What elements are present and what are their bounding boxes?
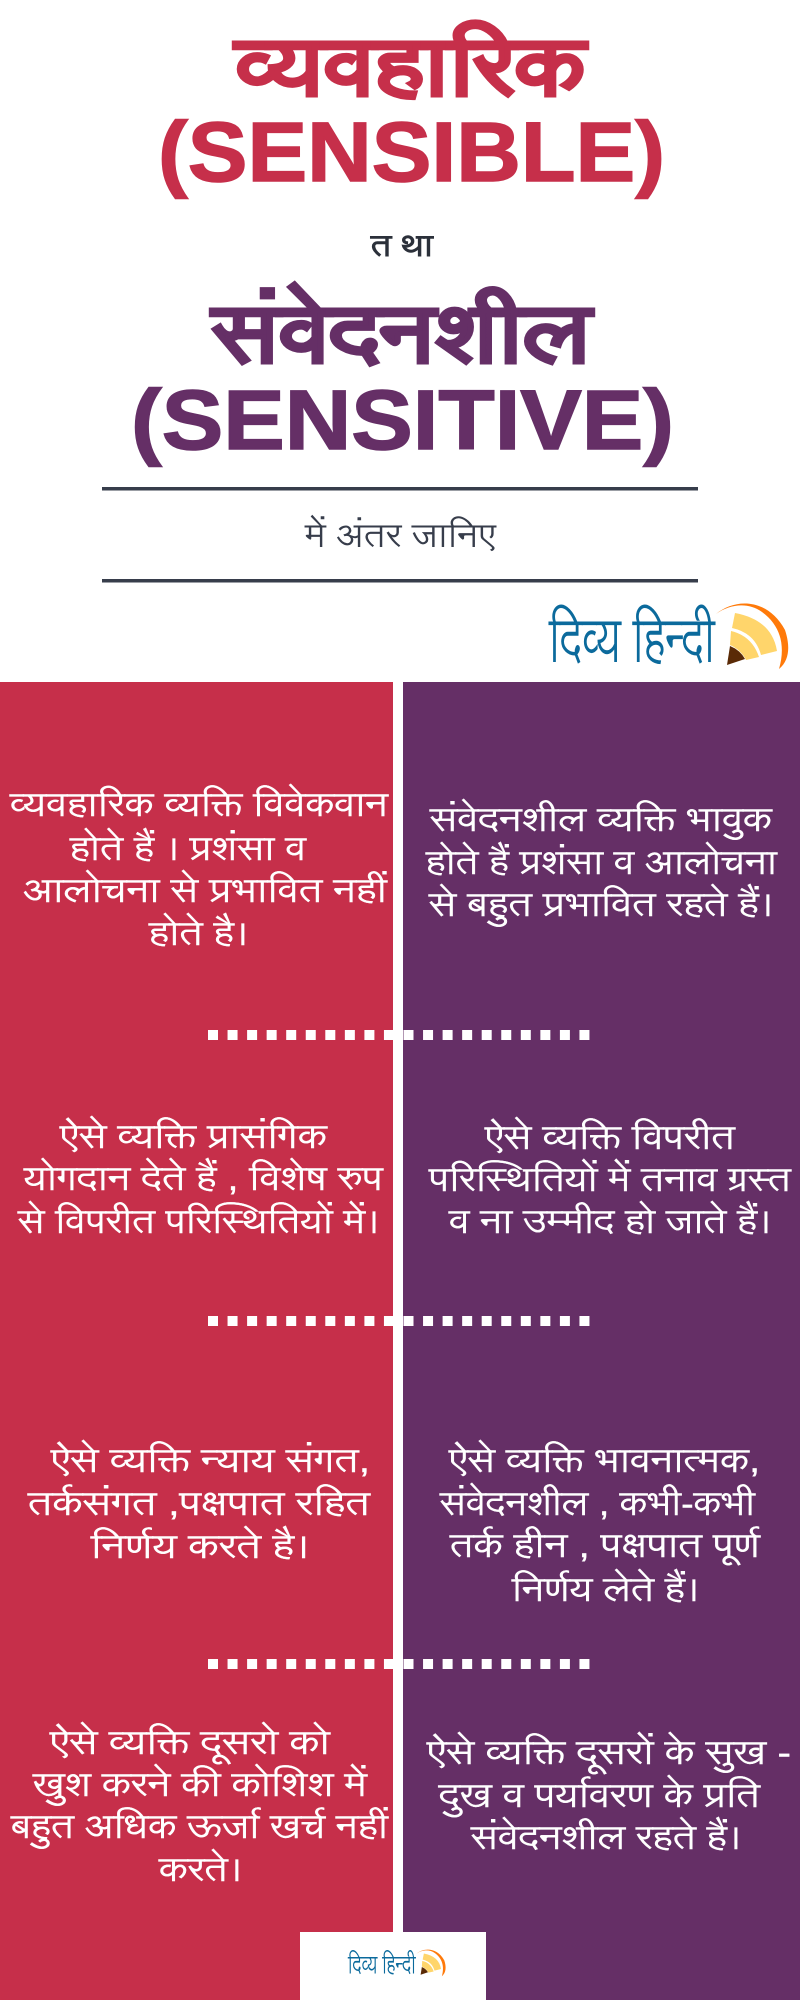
sensitive point 3 (439, 1439, 762, 1608)
sensitive point 4 (426, 1731, 791, 1856)
sensitive point 2: व ना उम्मीद हो जाते हैं। (448, 1200, 771, 1240)
dotted divider 1 (208, 1030, 590, 1040)
footer white box (300, 1932, 486, 2000)
sensible point 4: करते। (158, 1848, 242, 1888)
sensible point 4: ऐसे व्यक्ति दूसरो को (49, 1721, 332, 1765)
title: sensitive: (SENSITIVE) (131, 373, 674, 467)
sensible point 2: ऐसे व्यक्ति प्रासंगिक (59, 1115, 328, 1155)
sensible point 3: ऐसे व्यक्ति न्याय संगत, (50, 1439, 370, 1479)
sensible point 1: होते है। (148, 912, 248, 952)
dotted divider 2 (208, 1316, 590, 1326)
subtitle: में अंतर जानिए (304, 514, 497, 554)
panel: sensitive (403, 682, 800, 2000)
sensible point 4: खुश करने की कोशिश में (32, 1763, 369, 1806)
sensitive point 1: से बहुत प्रभावित रहते हैं। (428, 883, 773, 927)
title: sensible: व्यवहारिक (232, 20, 588, 112)
dotted divider 3 (208, 1659, 590, 1669)
panel: sensible (0, 682, 393, 2000)
sensible point 3 (27, 1439, 372, 1565)
logo: दिव्य हिन्दी (548, 605, 716, 676)
sensitive point 3: तर्क हीन , पक्षपात पूर्ण (449, 1525, 762, 1566)
connector word: त था (370, 230, 434, 263)
sensible point 3: निर्णय करते है। (90, 1525, 309, 1565)
sensible point 1: व्यवहारिक व्यक्ति विवेकवान (9, 783, 389, 823)
sensible point 1: आलोचना से प्रभावित नहीं (23, 869, 389, 909)
sensible point 3: तर्कसंगत ,पक्षपात रहित (27, 1483, 372, 1522)
sensible point 2: से विपरीत परिस्थितियों में। (17, 1200, 379, 1240)
sensitive point 3: ऐसे व्यक्ति भावनात्मक, (448, 1439, 760, 1479)
sensible point 2 (17, 1115, 384, 1240)
sensitive point 1 (425, 798, 779, 927)
sensible point 4 (10, 1721, 390, 1888)
sensible point 1 (9, 783, 389, 952)
sensible point 4: बहुत अधिक ऊर्जा खर्च नहीं (10, 1806, 390, 1849)
title: sensible: (SENSIBLE) (158, 105, 665, 199)
footer logo: दिव्य हिन्दी (347, 1948, 416, 1979)
sensible point 2: योगदान देते हैं , विशेष रुप (23, 1157, 384, 1197)
sensitive point 4: ऐसे व्यक्ति दूसरों के सुख - (426, 1731, 791, 1775)
sensitive point 3: संवेदनशील , कभी-कभी (439, 1482, 757, 1522)
sensitive point 1: संवेदनशील व्यक्ति भावुक (429, 798, 773, 840)
sensitive point 1: होते हैं प्रशंसा व आलोचना (425, 841, 779, 881)
sensitive point 3: निर्णय लेते हैं। (511, 1568, 699, 1608)
sensitive point 2: परिस्थितियों में तनाव ग्रस्त (428, 1158, 793, 1198)
title: sensitive: संवेदनशील (209, 282, 595, 379)
sensitive point 2 (428, 1116, 793, 1240)
sensitive point 4: दुख व पर्यावरण के प्रति (438, 1774, 762, 1818)
title: sensitive (131, 282, 674, 467)
title: sensible (158, 20, 665, 199)
sensitive point 2: ऐसे व्यक्ति विपरीत (484, 1116, 737, 1156)
sensitive point 4: संवेदनशील रहते हैं। (470, 1816, 741, 1856)
sensible point 1: होते हैं । प्रशंसा व (69, 827, 307, 867)
